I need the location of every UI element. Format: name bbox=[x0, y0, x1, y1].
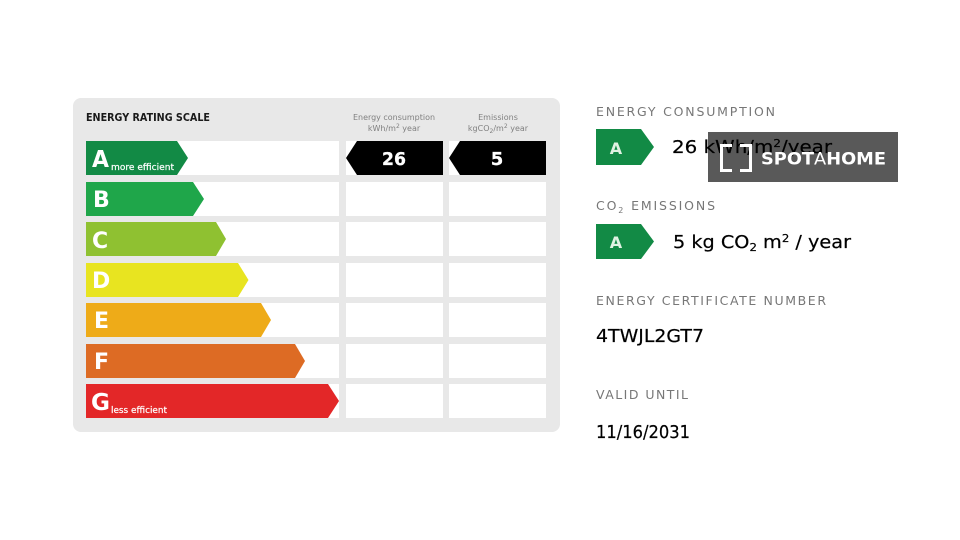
label: valid until: VALID UNTIL bbox=[596, 387, 688, 402]
rating arrow G bbox=[86, 384, 339, 418]
rating arrow C: C bbox=[92, 229, 108, 254]
label: CO2 emissions: EMISSIONS bbox=[625, 198, 715, 213]
section: valid until bbox=[596, 387, 690, 443]
icon: brackets bbox=[722, 146, 750, 170]
column heading: emissions: Emissions bbox=[478, 113, 518, 122]
column heading: energy consumption: Energy consumption bbox=[353, 113, 435, 122]
column heading: emissions: kgCO bbox=[468, 124, 490, 133]
value: emissions: 2 bbox=[749, 241, 757, 254]
badge: consumption rating A bbox=[596, 129, 654, 165]
label: certificate number: ENERGY CERTIFICATE NUMBER bbox=[596, 293, 826, 308]
value: emissions: / year bbox=[789, 232, 852, 253]
value: consumption: /year bbox=[781, 137, 833, 158]
value: emissions: 5 kg CO bbox=[673, 232, 744, 253]
heading: energy rating scale: ENERGY RATING SCALE bbox=[86, 112, 210, 124]
rating arrow G: G bbox=[91, 390, 110, 416]
column heading: energy consumption bbox=[353, 113, 435, 133]
badge: emissions rating A: A bbox=[610, 233, 623, 252]
section: CO2 emissions bbox=[596, 198, 852, 259]
section: energy certificate number bbox=[596, 293, 826, 347]
value: certificate number: 4TWJL2GT7 bbox=[596, 326, 704, 347]
value: consumption: 2 bbox=[773, 137, 781, 150]
section: energy consumption bbox=[596, 104, 833, 165]
column heading: emissions bbox=[468, 113, 529, 135]
emissions value marker: 5: 5 bbox=[491, 149, 503, 170]
rating arrow D bbox=[86, 263, 248, 297]
rating arrow B bbox=[86, 182, 204, 216]
consumption value marker: 26: 26 bbox=[382, 149, 406, 170]
rating arrow A bbox=[86, 141, 188, 175]
column heading: emissions: /m bbox=[493, 124, 504, 133]
emissions value marker: 5 bbox=[449, 141, 546, 175]
rating arrow D: D bbox=[92, 269, 110, 294]
rating arrow E: E bbox=[94, 309, 109, 334]
rating arrow C bbox=[86, 222, 226, 256]
badge: consumption rating A: A bbox=[610, 139, 623, 158]
watermark: Spotahome bbox=[708, 132, 898, 182]
rating arrow A: more efficient bbox=[111, 163, 174, 173]
rating row backgrounds bbox=[86, 141, 546, 418]
rating arrow G: less efficient bbox=[111, 406, 167, 416]
column heading: energy consumption: kWh/m bbox=[368, 124, 396, 133]
value: emissions: m bbox=[757, 232, 782, 253]
rating arrow B: B bbox=[93, 188, 110, 213]
label: CO2 emissions: CO bbox=[596, 198, 616, 213]
watermark: Spotahome: SPOTAHOME bbox=[761, 150, 886, 170]
column heading: energy consumption: 2 bbox=[396, 123, 400, 130]
column heading: energy consumption: year bbox=[400, 124, 421, 133]
value: emissions: 2 bbox=[782, 232, 789, 245]
badge: emissions rating A bbox=[596, 224, 654, 259]
rating arrow F: F bbox=[94, 350, 109, 375]
label: energy consumption: ENERGY CONSUMPTION bbox=[596, 104, 775, 119]
panel: energy rating scale bbox=[73, 98, 560, 432]
column heading: emissions: year bbox=[508, 124, 529, 133]
value: valid until: 11/16/2031 bbox=[596, 422, 690, 443]
rating arrow E bbox=[86, 303, 271, 337]
value: consumption: 26 kWh/m bbox=[672, 137, 764, 158]
consumption value marker: 26 bbox=[346, 141, 443, 175]
column heading: emissions: 2 bbox=[490, 128, 494, 135]
label: CO2 emissions: 2 bbox=[618, 206, 623, 215]
column heading: emissions: 2 bbox=[504, 123, 508, 130]
rating arrow F bbox=[86, 344, 305, 378]
rating arrow A: A bbox=[92, 147, 109, 173]
